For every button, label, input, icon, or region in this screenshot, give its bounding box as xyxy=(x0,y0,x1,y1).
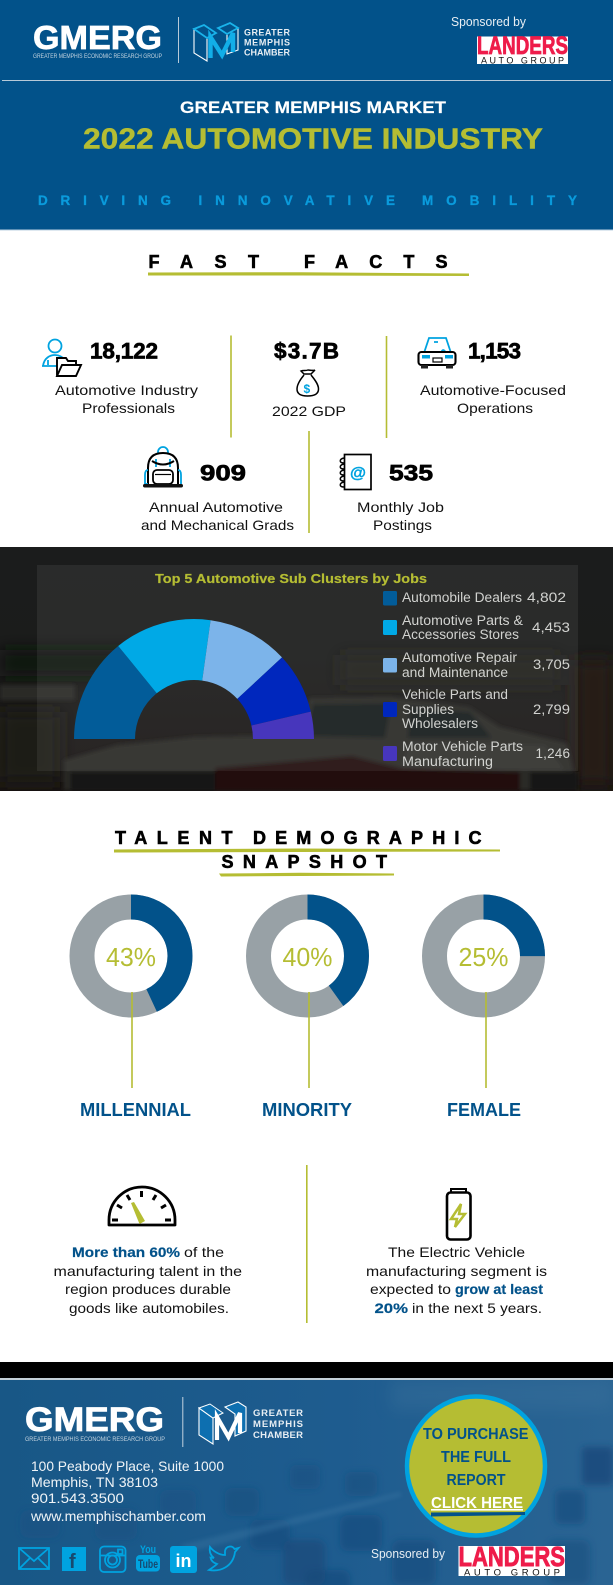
logo: Greater Memphis Chamber: GREATER xyxy=(244,28,290,38)
icon: address book: @ xyxy=(350,465,366,482)
text: manufacturing talent: of the xyxy=(184,1244,224,1260)
logo: Greater Memphis Chamber: MEMPHIS xyxy=(244,38,290,48)
logo: GMERG footer: GMERG xyxy=(25,1401,164,1439)
text: electric vehicle growth: in the next 5 years. xyxy=(412,1300,542,1316)
legend item: parts and accessories: Accessories Stores xyxy=(402,627,519,642)
text: contact address: 100 Peabody Place, Suite 1000 xyxy=(31,1458,224,1474)
icon: email xyxy=(19,1548,49,1569)
chart: millennial donut xyxy=(80,907,191,1120)
legend item: automobile dealers xyxy=(383,590,566,606)
label: monthly job postings xyxy=(357,499,444,533)
chart: female donut: FEMALE xyxy=(447,1099,521,1120)
icon: address book xyxy=(340,454,371,490)
label: automotive-focused operations: Operations xyxy=(457,400,533,416)
heading: talent demographic snapshot xyxy=(114,828,500,876)
text: manufacturing talent: More than 60% xyxy=(72,1244,181,1260)
label: automotive industry professionals xyxy=(55,382,198,416)
legend item: manufacturing: 1,246 xyxy=(536,746,570,761)
logo: GMERG: GMERG xyxy=(33,19,162,56)
legend item: automobile dealers: 4,802 xyxy=(527,590,566,605)
heading: fast facts xyxy=(148,252,469,276)
logo: GMERG footer: GREATER MEMPHIS ECONOMIC RESEARCH GROUP xyxy=(25,1437,165,1443)
logo: Greater Memphis Chamber xyxy=(194,23,290,61)
legend item: repair and maintenance: and Maintenance xyxy=(402,665,508,680)
icon: battery xyxy=(447,1189,470,1240)
icon: youtube xyxy=(136,1544,160,1572)
background traffic photo approximation xyxy=(186,1388,613,1585)
callout: purchase report button xyxy=(407,1396,545,1536)
icon: linkedin xyxy=(170,1546,197,1573)
text: manufacturing talent: region produces durable xyxy=(65,1281,231,1297)
panel: header xyxy=(0,0,613,230)
text: contact address: www.memphischamber.com xyxy=(30,1508,206,1524)
callout: purchase report button: CLICK HERE xyxy=(431,1495,523,1512)
label: automotive-focused operations: Automotive-Focused xyxy=(420,382,566,398)
text: manufacturing talent xyxy=(54,1244,242,1316)
sponsor label: Sponsored by xyxy=(451,15,527,29)
logo: chamber footer xyxy=(199,1402,303,1444)
callout: purchase report button: TO PURCHASE xyxy=(423,1426,529,1443)
icon: person with folder xyxy=(42,340,81,376)
title: 2022 AUTOMOTIVE INDUSTRY xyxy=(83,124,543,156)
panel: footer xyxy=(0,1378,613,1585)
label: annual grads xyxy=(141,499,294,533)
legend item: parts and accessories: Automotive Parts & xyxy=(402,613,523,628)
chart title: Top 5 Automotive Sub Clusters by Jobs xyxy=(155,571,427,586)
callout: purchase report button: REPORT xyxy=(446,1472,506,1489)
label: monthly job postings: Monthly Job xyxy=(357,499,444,515)
label: 2022 GDP: 2022 GDP xyxy=(272,403,346,419)
legend item: manufacturing: Motor Vehicle Parts xyxy=(402,739,523,754)
text: contact address: 901.543.3500 xyxy=(31,1490,124,1506)
text: manufacturing talent: goods like automobiles. xyxy=(69,1300,229,1316)
text: contact address xyxy=(30,1458,224,1524)
logo: chamber footer: GREATER xyxy=(253,1408,303,1419)
icon: backpack xyxy=(143,447,183,488)
tagline: INNOVATIVE xyxy=(198,193,395,208)
icon: money bag xyxy=(297,370,318,396)
icon: speedometer gauge xyxy=(109,1187,175,1225)
heading: talent demographic snapshot: TALENT xyxy=(115,828,232,848)
chart: minority donut: 40% xyxy=(282,942,332,972)
logo: Landers footer xyxy=(458,1541,565,1578)
chart: female donut: 25% xyxy=(458,942,508,972)
callout: purchase report button: THE FULL xyxy=(441,1449,511,1466)
legend xyxy=(383,590,570,769)
legend item: manufacturing: Manufacturing xyxy=(402,754,493,769)
legend item: wholesalers: Supplies xyxy=(402,702,454,717)
sponsor label footer: Sponsored by xyxy=(371,1547,446,1561)
stat: 909: 909 xyxy=(200,460,246,486)
icon: facebook: f xyxy=(69,1551,76,1573)
logo: chamber footer: CHAMBER xyxy=(253,1430,303,1441)
label: monthly job postings: Postings xyxy=(373,517,432,533)
icon: youtube: You xyxy=(140,1544,156,1556)
translucent chart panel xyxy=(37,565,578,771)
logo: Landers footer: AUTO GROUP xyxy=(464,1568,560,1578)
logo: Landers Auto Group: LANDERS xyxy=(477,32,568,60)
legend item: wholesalers: Vehicle Parts and xyxy=(402,687,508,702)
legend item: parts and accessories xyxy=(383,613,570,642)
legend item: repair and maintenance xyxy=(383,650,570,680)
label: automotive-focused operations xyxy=(420,382,566,416)
logo: Greater Memphis Chamber: CHAMBER xyxy=(244,48,290,58)
label: automotive industry professionals: Automotive Industry xyxy=(55,382,198,398)
text: electric vehicle growth: The Electric Vehicle xyxy=(388,1244,525,1260)
stat: 18,122: 18,122 xyxy=(90,338,158,364)
icon: car xyxy=(418,338,456,368)
panel: fast facts xyxy=(42,336,566,533)
legend item: automobile dealers: Automobile Dealers xyxy=(402,590,522,605)
heading: fast facts: FACTS xyxy=(304,252,448,272)
chart: millennial donut: 43% xyxy=(106,942,156,972)
text: manufacturing talent: manufacturing talent in the xyxy=(54,1263,242,1279)
heading: talent demographic snapshot: SNAPSHOT xyxy=(222,852,387,872)
half-donut chart xyxy=(74,619,314,739)
logo: Landers Auto Group xyxy=(477,32,568,66)
tagline xyxy=(38,193,577,208)
logo: Landers Auto Group: AUTO GROUP xyxy=(481,56,564,66)
logo: Landers footer: LANDERS xyxy=(458,1541,565,1572)
icon: facebook xyxy=(62,1547,86,1573)
legend item: wholesalers xyxy=(383,687,570,731)
tagline: MOBILITY xyxy=(422,193,577,208)
heading: fast facts: FAST xyxy=(148,252,259,272)
heading: talent demographic snapshot: DEMOGRAPHIC xyxy=(253,828,482,848)
stat: 1,153: 1,153 xyxy=(468,338,521,364)
label: annual grads: Annual Automotive xyxy=(149,499,283,515)
icon: money bag: $ xyxy=(304,382,310,396)
label: annual grads: and Mechanical Grads xyxy=(141,517,294,533)
text: electric vehicle growth: expected to xyxy=(370,1281,451,1297)
logo: chamber footer: MEMPHIS xyxy=(253,1419,303,1430)
chart: millennial donut: MILLENNIAL xyxy=(80,1099,191,1120)
label: automotive industry professionals: Professionals xyxy=(82,400,175,416)
text: electric vehicle growth: manufacturing segment is xyxy=(366,1263,547,1279)
legend item: parts and accessories: 4,453 xyxy=(532,620,570,635)
icon: instagram xyxy=(100,1546,126,1572)
legend item: manufacturing xyxy=(383,739,570,769)
text: electric vehicle growth xyxy=(366,1244,547,1316)
legend item: wholesalers: Wholesalers xyxy=(402,716,478,731)
text: contact address: Memphis, TN 38103 xyxy=(31,1474,158,1490)
background photo approximation xyxy=(0,547,613,791)
panel: sub clusters dark band xyxy=(0,547,613,791)
logo: GMERG: GREATER MEMPHIS ECONOMIC RESEARCH GROUP xyxy=(33,54,162,60)
icon: youtube: Tube xyxy=(138,1559,158,1571)
text: electric vehicle growth: grow at least xyxy=(455,1281,543,1297)
stat: 535: 535 xyxy=(389,460,433,486)
stat: $3.7B: $3.7B xyxy=(274,338,339,364)
subtitle: GREATER MEMPHIS MARKET xyxy=(180,98,447,117)
legend item: repair and maintenance: 3,705 xyxy=(533,657,570,672)
chart: minority donut: MINORITY xyxy=(262,1099,353,1120)
legend item: repair and maintenance: Automotive Repair xyxy=(402,650,518,665)
icon: linkedin: in xyxy=(176,1551,192,1571)
tagline: DRIVING xyxy=(38,193,171,208)
legend item: wholesalers: 2,799 xyxy=(533,702,570,717)
text: electric vehicle growth: 20% xyxy=(374,1300,409,1316)
icon: twitter xyxy=(209,1547,238,1570)
chart: minority donut xyxy=(258,907,356,1120)
chart: female donut xyxy=(434,907,532,1120)
